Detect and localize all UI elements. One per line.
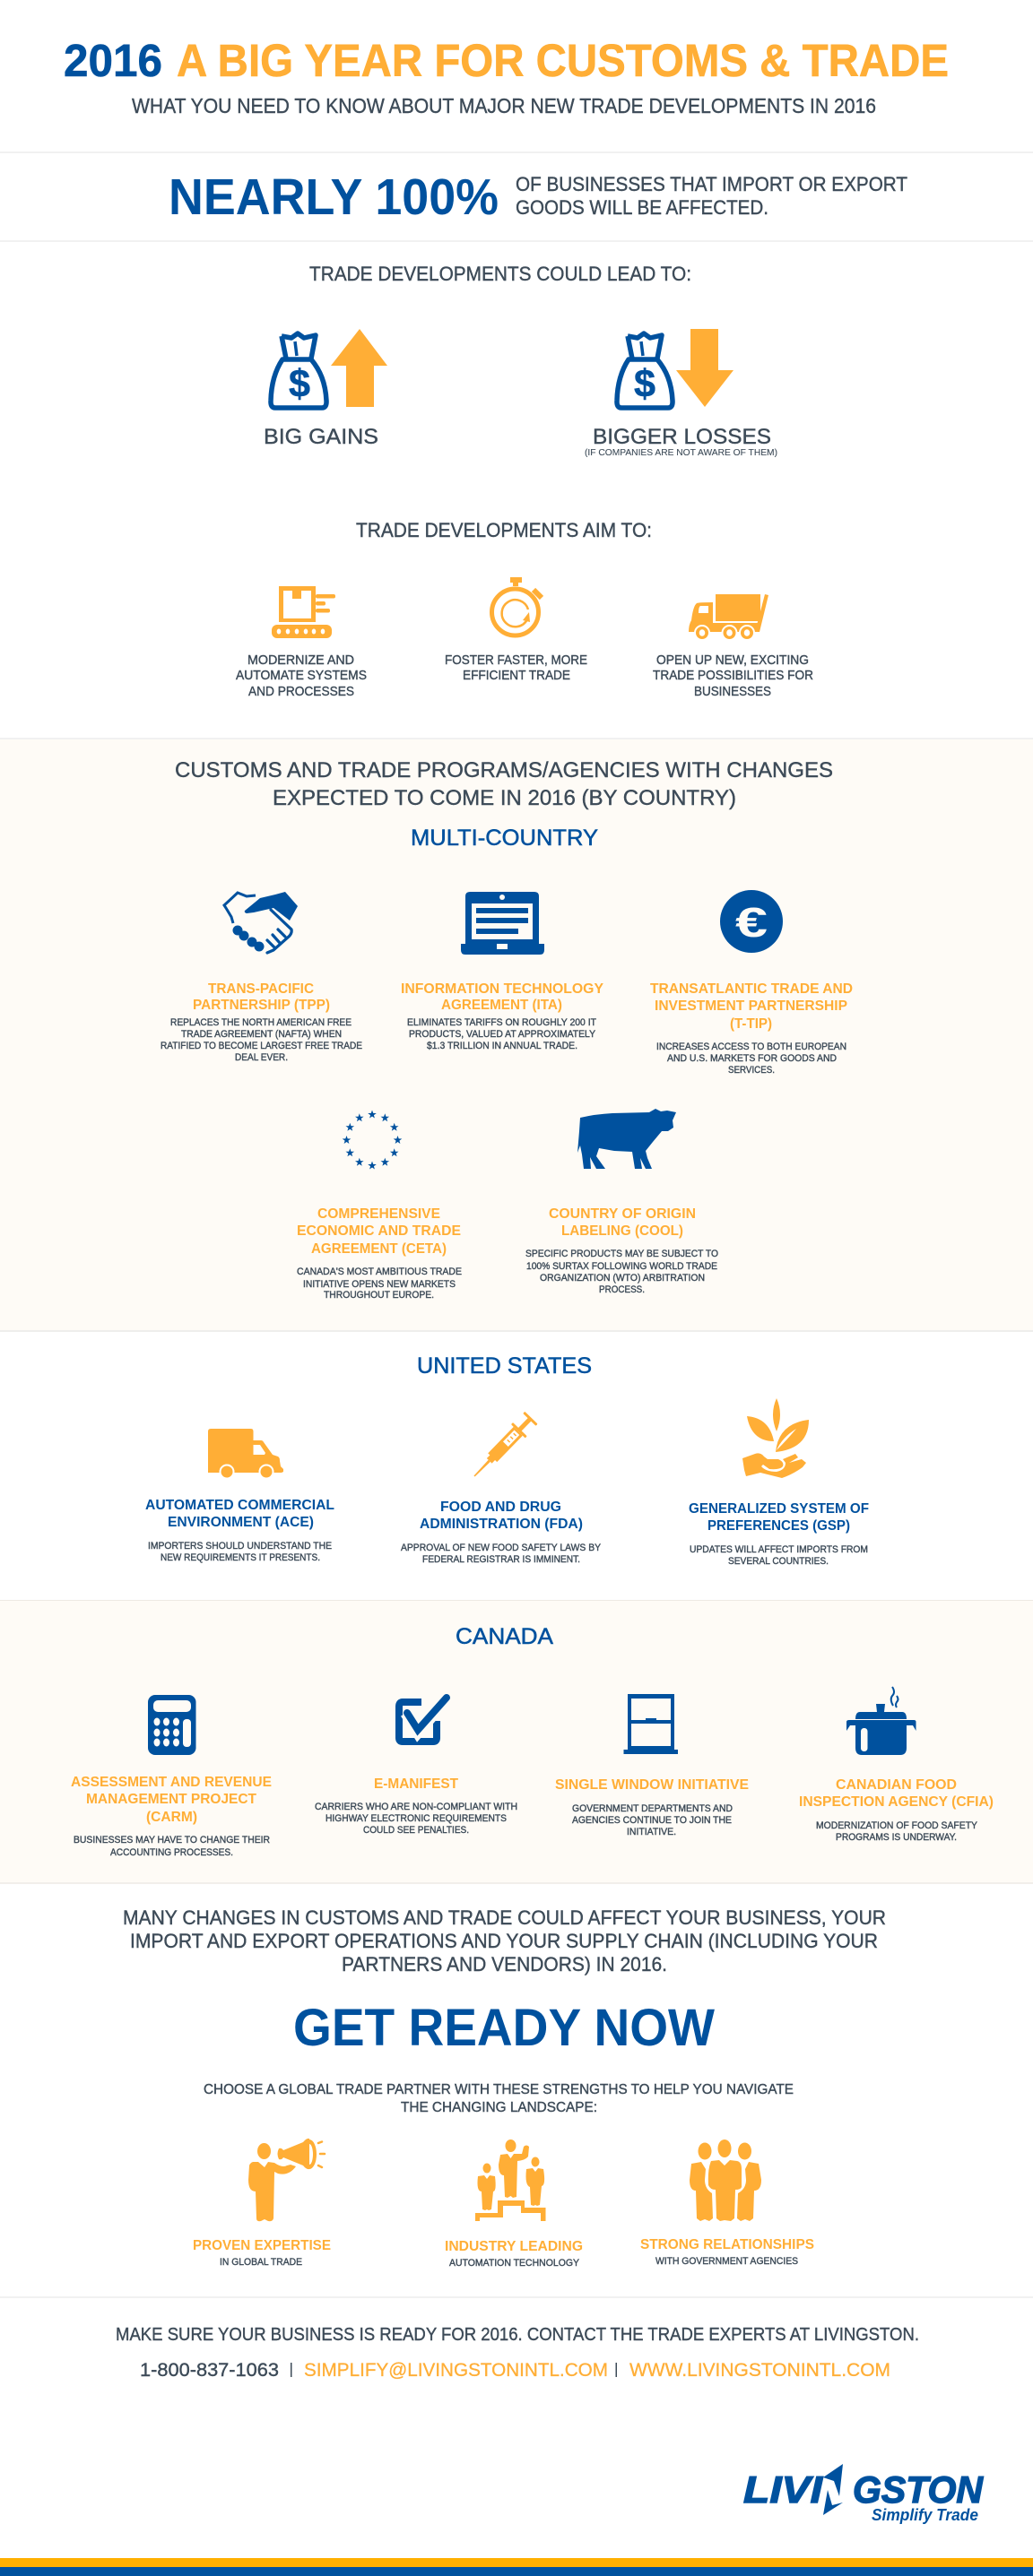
stat description [516, 173, 907, 219]
contact details: SIMPLIFY@LIVINGSTONINTL.COM [304, 2360, 608, 2381]
item: single window [555, 1777, 749, 1837]
item: CFIA [799, 1777, 994, 1843]
logo [743, 2464, 985, 2524]
icon: person with megaphone [248, 2139, 325, 2221]
icon: handshake [224, 892, 298, 953]
item: T-TIP: INCREASES ACCESS TO BOTH EUROPEAN [656, 1042, 846, 1052]
item: e-manifest: E-MANIFEST [374, 1776, 458, 1792]
panel: multi-country [0, 739, 1033, 1331]
item: strong relationships: STRONG RELATIONSHIPS [640, 2237, 814, 2252]
icon: EU stars [343, 1110, 402, 1169]
item: strong relationships [640, 2237, 814, 2267]
bigger losses label [585, 425, 777, 458]
item: e-manifest [315, 1776, 517, 1836]
text: open up: BUSINESSES [694, 685, 771, 699]
text: open up: OPEN UP NEW, EXCITING [656, 653, 809, 668]
item: industry leading: INDUSTRY LEADING [445, 2239, 583, 2254]
text: modernize: MODERNIZE AND [247, 653, 354, 668]
item: CFIA: INSPECTION AGENCY (CFIA) [799, 1794, 994, 1810]
united states heading: UNITED STATES [417, 1353, 592, 1379]
panel: get ready [123, 1906, 886, 2269]
item: ITA: PRODUCTS, VALUED AT APPROXIMATELY [409, 1029, 596, 1040]
multi-country heading: MULTI-COUNTRY [411, 826, 598, 851]
text: foster: FOSTER FASTER, MORE [445, 653, 587, 668]
item: CARM: ASSESSMENT AND REVENUE [71, 1775, 272, 1790]
icon: people on podium [475, 2139, 545, 2221]
item: e-manifest: COULD SEE PENALTIES. [363, 1825, 469, 1836]
item: COOL: 100% SURTAX FOLLOWING WORLD TRADE [526, 1261, 717, 1272]
icon: window [624, 1694, 678, 1754]
text: modernize: AUTOMATE SYSTEMS [236, 669, 367, 683]
item: strong relationships: WITH GOVERNMENT AGENCIES [655, 2256, 798, 2267]
bigger losses label: (IF COMPANIES ARE NOT AWARE OF THEM) [585, 447, 777, 458]
item: CETA: THROUGHOUT EUROPE. [324, 1290, 434, 1301]
item: CFIA: CANADIAN FOOD [836, 1777, 957, 1793]
item: single window: INITIATIVE. [627, 1827, 676, 1837]
big stat: NEARLY 100% [169, 169, 499, 226]
item: ACE: ENVIRONMENT (ACE) [168, 1515, 314, 1530]
text: foster [445, 653, 587, 683]
panel: aim to [236, 519, 813, 699]
stat description: GOODS WILL BE AFFECTED. [516, 196, 768, 219]
item: COOL: LABELING (COOL) [561, 1223, 683, 1239]
canada heading: CANADA [456, 1624, 553, 1649]
text: open up [653, 653, 813, 699]
item: TPP: REPLACES THE NORTH AMERICAN FREE [170, 1017, 352, 1028]
section heading: EXPECTED TO COME IN 2016 (BY COUNTRY) [273, 786, 736, 810]
item: T-TIP: INVESTMENT PARTNERSHIP [655, 998, 847, 1014]
bigger losses label: BIGGER LOSSES [593, 425, 771, 449]
item: TPP: DEAL EVER. [235, 1052, 288, 1063]
item: CFIA: PROGRAMS IS UNDERWAY. [836, 1832, 957, 1843]
icon: money bag with down arrow: $ [634, 362, 655, 406]
icon: euro: € [735, 899, 768, 946]
icon: money bag with up arrow: $ [289, 362, 310, 406]
panel: canada [0, 1600, 1033, 1883]
title: 2016 [64, 35, 162, 86]
logo: LIVI [743, 2468, 824, 2511]
item: industry leading: AUTOMATION TECHNOLOGY [449, 2258, 580, 2269]
icon: laptop [461, 892, 544, 955]
item: T-TIP: (T-TIP) [730, 1016, 772, 1032]
icon: truck [689, 594, 768, 640]
item: FDA: APPROVAL OF NEW FOOD SAFETY LAWS BY [401, 1543, 602, 1553]
intro text: MANY CHANGES IN CUSTOMS AND TRADE COULD AFFECT YOUR BUSINESS, YOUR [123, 1906, 886, 1929]
icon: stopwatch [491, 577, 542, 635]
item: CARM: (CARM) [146, 1810, 197, 1825]
icon: calculator [148, 1695, 195, 1755]
item: CETA: COMPREHENSIVE [317, 1206, 440, 1222]
icon: van [208, 1429, 283, 1479]
panel: could lead to [264, 263, 777, 458]
item: FDA [401, 1500, 602, 1565]
text: open up: TRADE POSSIBILITIES FOR [653, 669, 813, 683]
text: modernize [236, 653, 367, 699]
stat description: OF BUSINESSES THAT IMPORT OR EXPORT [516, 173, 907, 195]
logo: GSTON [853, 2468, 985, 2511]
item: e-manifest: CARRIERS WHO ARE NON-COMPLIANT WITH [315, 1802, 517, 1812]
item: CARM: MANAGEMENT PROJECT [86, 1792, 256, 1807]
item: COOL [525, 1206, 718, 1295]
subtitle: WHAT YOU NEED TO KNOW ABOUT MAJOR NEW TRADE DEVELOPMENTS IN 2016 [132, 94, 876, 117]
item: CETA: CANADA'S MOST AMBITIOUS TRADE [297, 1266, 462, 1277]
text: modernize: AND PROCESSES [248, 685, 354, 699]
item: ITA [401, 981, 603, 1051]
item: COOL: COUNTRY OF ORIGIN [549, 1206, 696, 1222]
footer stripes [0, 2558, 1033, 2576]
call to action: GET READY NOW [293, 1999, 715, 2057]
item: proven expertise: IN GLOBAL TRADE [220, 2257, 302, 2268]
heading: TRADE DEVELOPMENTS COULD LEAD TO: [309, 263, 691, 285]
item: ACE: NEW REQUIREMENTS IT PRESENTS. [161, 1552, 320, 1563]
item: single window: GOVERNMENT DEPARTMENTS AND [572, 1803, 733, 1814]
item: T-TIP: AND U.S. MARKETS FOR GOODS AND [667, 1053, 837, 1064]
item: COOL: SPECIFIC PRODUCTS MAY BE SUBJECT TO [525, 1249, 718, 1259]
icon: euro [720, 890, 783, 953]
item: GSP: PREFERENCES (GSP) [707, 1518, 850, 1534]
subheading: THE CHANGING LANDSCAPE: [401, 2100, 597, 2115]
item: CARM [71, 1775, 272, 1858]
item: TPP: RATIFIED TO BECOME LARGEST FREE TRADE [161, 1041, 362, 1051]
item: TPP: TRANS-PACIFIC [208, 981, 314, 997]
icon: cow [577, 1109, 676, 1169]
icon: syringe [467, 1411, 538, 1483]
item: ITA: ELIMINATES TARIFFS ON ROUGHLY 200 IT [407, 1017, 596, 1028]
item: FDA: ADMINISTRATION (FDA) [420, 1517, 583, 1532]
item: GSP: GENERALIZED SYSTEM OF [689, 1501, 869, 1517]
item: industry leading [445, 2239, 583, 2269]
text: foster: EFFICIENT TRADE [463, 669, 570, 683]
item: proven expertise [193, 2238, 331, 2268]
item: ITA: $1.3 TRILLION IN ANNUAL TRADE. [427, 1041, 577, 1051]
header section [64, 35, 949, 117]
contact details [140, 2360, 890, 2381]
item: ITA: INFORMATION TECHNOLOGY [401, 981, 603, 997]
panel: contact [116, 2324, 985, 2524]
item: TPP: PARTNERSHIP (TPP) [193, 998, 330, 1013]
item: ACE [145, 1498, 334, 1563]
item: CETA: AGREEMENT (CETA) [311, 1241, 447, 1257]
contact details: WWW.LIVINGSTONINTL.COM [629, 2360, 890, 2381]
item: TPP [161, 981, 362, 1063]
icon: checkbox [399, 1698, 447, 1742]
panel: united states [145, 1353, 869, 1567]
subheading [204, 2082, 794, 2115]
icon: pot [846, 1687, 916, 1755]
item: proven expertise: PROVEN EXPERTISE [193, 2238, 331, 2253]
item: e-manifest: HIGHWAY ELECTRONIC REQUIREMENTS [326, 1813, 507, 1824]
item: T-TIP: TRANSATLANTIC TRADE AND [650, 981, 853, 997]
subheading: CHOOSE A GLOBAL TRADE PARTNER WITH THESE STRENGTHS TO HELP YOU NAVIGATE [204, 2082, 794, 2097]
intro text: PARTNERS AND VENDORS) IN 2016. [342, 1953, 667, 1975]
heading: TRADE DEVELOPMENTS AIM TO: [356, 519, 652, 541]
icon: three people [690, 2139, 761, 2221]
section heading: CUSTOMS AND TRADE PROGRAMS/AGENCIES WITH CHANGES [175, 758, 833, 782]
item: T-TIP [650, 981, 853, 1076]
item: GSP: UPDATES WILL AFFECT IMPORTS FROM [690, 1544, 868, 1555]
item: CARM: ACCOUNTING PROCESSES. [110, 1847, 233, 1858]
item: COOL: ORGANIZATION (WTO) ARBITRATION [540, 1273, 705, 1284]
icon: money bag with down arrow [617, 329, 734, 408]
item: CARM: BUSINESSES MAY HAVE TO CHANGE THEIR [74, 1835, 270, 1846]
item: CETA [297, 1206, 462, 1301]
contact heading: MAKE SURE YOUR BUSINESS IS READY FOR 2016. CONTACT THE TRADE EXPERTS AT LIVINGSTON. [116, 2324, 919, 2345]
item: CETA: INITIATIVE OPENS NEW MARKETS [303, 1279, 456, 1290]
item: single window: AGENCIES CONTINUE TO JOIN THE [572, 1815, 732, 1826]
item: single window: SINGLE WINDOW INITIATIVE [555, 1777, 749, 1793]
big gains label: BIG GAINS [264, 425, 378, 449]
item: ACE: IMPORTERS SHOULD UNDERSTAND THE [148, 1541, 332, 1552]
intro text [123, 1906, 886, 1975]
icon: money bag with up arrow [271, 329, 387, 408]
item: FDA: FEDERAL REGISTRAR IS IMMINENT. [422, 1554, 580, 1565]
title: A BIG YEAR FOR CUSTOMS & TRADE [177, 35, 949, 86]
item: TPP: TRADE AGREEMENT (NAFTA) WHEN [181, 1029, 342, 1040]
item: T-TIP: SERVICES. [728, 1065, 775, 1076]
item: ITA: AGREEMENT (ITA) [441, 998, 562, 1013]
item: GSP [689, 1501, 869, 1567]
stat banner: nearly 100% [169, 169, 907, 226]
item: FDA: FOOD AND DRUG [440, 1500, 561, 1515]
contact details: 1-800-837-1063 [140, 2360, 279, 2381]
intro text: IMPORT AND EXPORT OPERATIONS AND YOUR SUPPLY CHAIN (INCLUDING YOUR [130, 1930, 878, 1952]
logo: Simplify Trade [872, 2506, 978, 2524]
item: CFIA: MODERNIZATION OF FOOD SAFETY [816, 1820, 978, 1831]
icon: plant in hand [742, 1398, 809, 1478]
item: GSP: SEVERAL COUNTRIES. [728, 1556, 829, 1567]
icon: conveyor [272, 586, 335, 638]
item: ACE: AUTOMATED COMMERCIAL [145, 1498, 334, 1513]
section heading [175, 758, 833, 810]
item: CETA: ECONOMIC AND TRADE [297, 1223, 461, 1239]
item: COOL: PROCESS. [599, 1284, 645, 1295]
